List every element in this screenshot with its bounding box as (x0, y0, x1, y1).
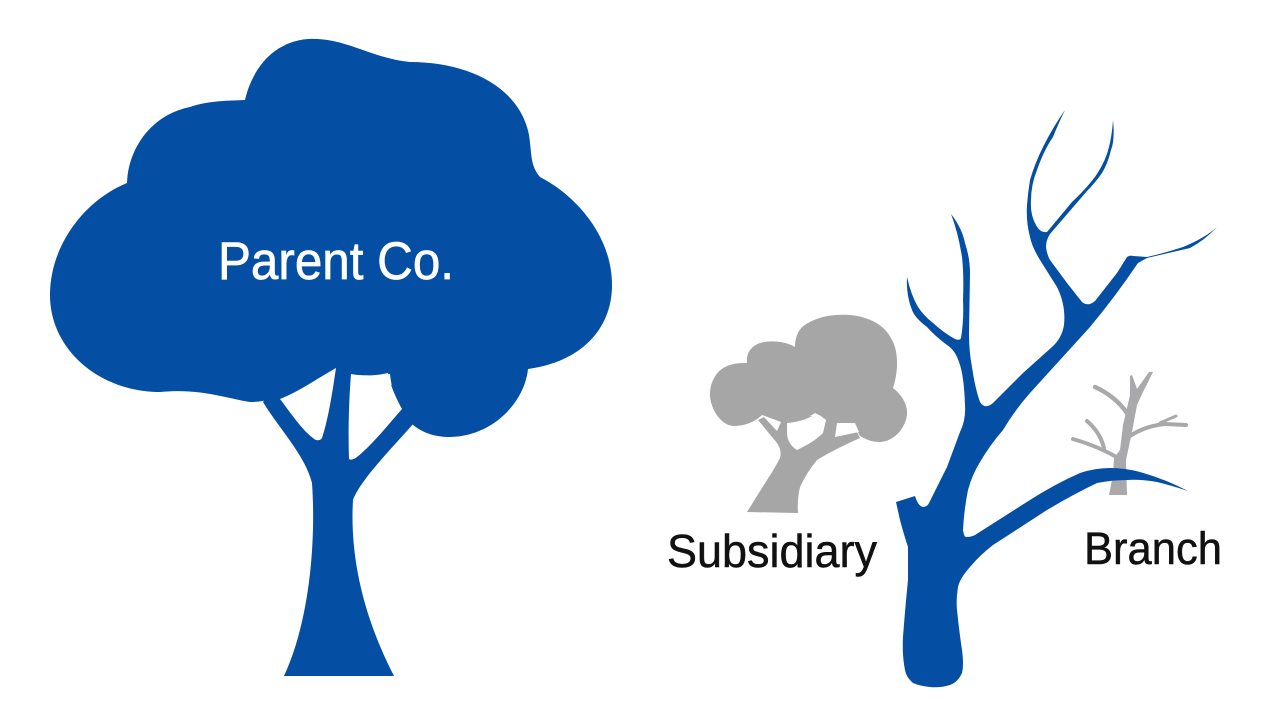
tree crown (50, 39, 612, 437)
heading: Parent Co.: Parent Co. (218, 232, 454, 291)
icon: bare blue branch tree (896, 110, 1217, 687)
grey trunk (747, 414, 860, 513)
right gap between boughs (349, 373, 402, 460)
icon: large parent tree (50, 39, 612, 676)
icon: small grey branch tree (1073, 372, 1186, 495)
icon: grey subsidiary tree (710, 315, 907, 513)
grey gap middle (787, 414, 826, 450)
label: Subsidiary: Subsidiary (667, 525, 877, 577)
tree trunk (263, 350, 430, 676)
sapling boughs (1073, 387, 1186, 458)
grey gap right (835, 423, 859, 437)
label: Branch: Branch (1084, 523, 1222, 574)
sapling trunk (1109, 372, 1153, 495)
left gap between boughs (280, 368, 336, 440)
grey gap left (762, 415, 781, 431)
grey crown (710, 315, 907, 442)
